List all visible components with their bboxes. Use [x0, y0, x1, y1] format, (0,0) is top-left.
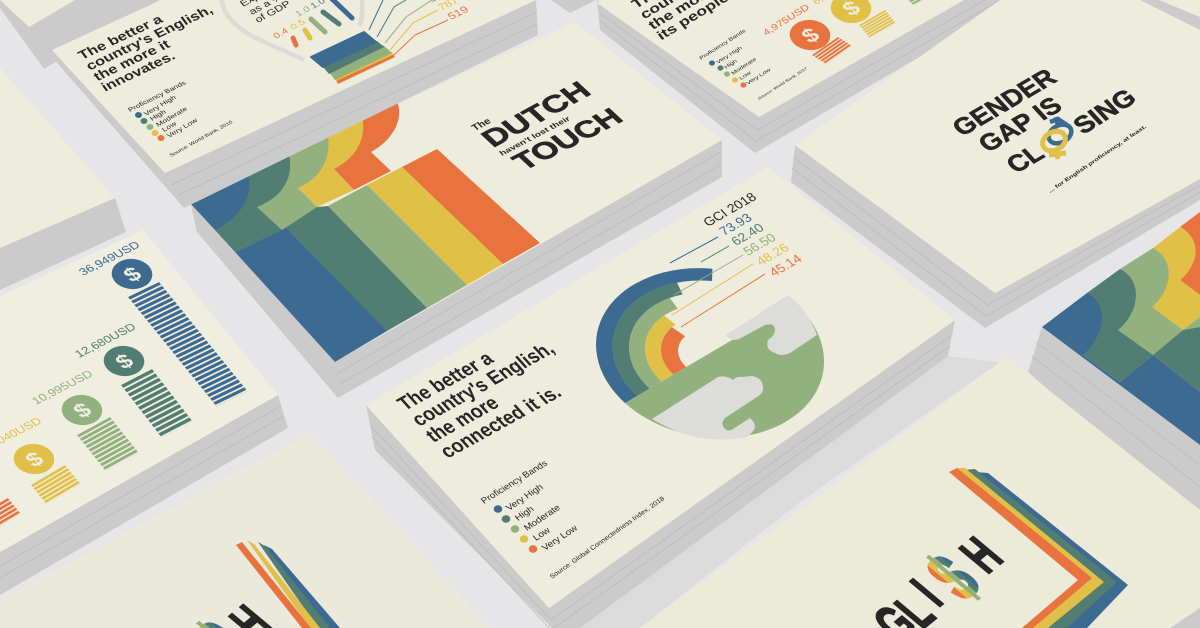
stacked bar: very low — [812, 37, 852, 64]
artwork: rainbow keys — [1042, 212, 1200, 445]
stripes: rainbow corner — [236, 540, 340, 628]
value labels: 73.93 — [716, 211, 755, 238]
card: top-middle stack corner — [551, 0, 596, 13]
source: Source: Global Connectedness Index, 2018 — [549, 496, 666, 580]
value label: 4,975USD — [761, 3, 812, 38]
icon: blue coin: $ — [118, 262, 147, 286]
legend title: Proficiency Bands — [699, 29, 747, 61]
corner stack — [1170, 608, 1200, 628]
stripe: orange — [402, 149, 540, 264]
icon: green coin: $ — [68, 398, 97, 422]
stacked bar: low — [31, 465, 81, 504]
heading: innovates. — [99, 49, 178, 95]
band: orange — [334, 92, 399, 190]
title letters: H — [947, 527, 1015, 583]
title: The — [470, 116, 494, 133]
stripe: yellow — [367, 167, 503, 285]
ring: high — [572, 278, 737, 396]
card: bottom-left ENGLISH — [0, 433, 490, 628]
bulb base — [311, 32, 395, 84]
title — [947, 64, 1142, 178]
card: The Dutch haven't lost their touch — [190, 22, 722, 398]
legend swatches and labels: Very High — [716, 46, 743, 65]
small bars — [293, 0, 352, 45]
ring: low — [618, 315, 708, 382]
title letters: I — [898, 569, 954, 616]
value labels — [700, 190, 805, 279]
ring: very low — [641, 326, 706, 374]
ring: very high — [549, 250, 768, 403]
shadow below GCI card — [553, 356, 1000, 628]
icon: yellow coin: $ — [20, 447, 49, 471]
stacked bar: moderate — [77, 417, 139, 471]
stripe: blue — [235, 228, 387, 362]
title: GENDER — [947, 64, 1063, 141]
legend swatches and labels — [709, 46, 773, 88]
stacked bar: low — [859, 10, 896, 38]
bar values: 1.0 — [293, 5, 313, 19]
landmass: lower cloud — [652, 376, 763, 440]
rings — [549, 250, 768, 403]
card: top-right stack corner — [1140, 0, 1200, 30]
legend swatches and labels: Moderate — [522, 503, 562, 532]
legend swatches and labels: High — [513, 504, 536, 522]
legend swatches and labels: Very Low — [165, 116, 200, 139]
legend swatches and labels: Very Low — [540, 523, 579, 552]
heading: The better a — [393, 348, 498, 415]
legend swatches and labels: Moderate — [154, 105, 189, 128]
title: CL — [1001, 140, 1050, 178]
band: green — [257, 128, 329, 230]
title: GAP IS — [973, 92, 1068, 157]
patent values: 519 — [446, 5, 471, 22]
subtitle: ... for English proficiency, at least. — [1047, 124, 1148, 194]
stripe: green — [328, 185, 467, 308]
chart: blue coin stack — [76, 238, 247, 406]
card: gender gap is closing — [791, 0, 1200, 328]
value labels: GCI 2018 — [700, 190, 759, 229]
leader lines — [369, 0, 448, 55]
chart: green coin stack — [29, 367, 139, 471]
icon: blue coin — [104, 253, 160, 295]
chevron rainbow — [949, 468, 1128, 628]
title letters — [178, 595, 285, 628]
title letters — [860, 527, 1015, 628]
card: blank left card — [0, 68, 126, 290]
stacked bar: very high — [128, 282, 247, 406]
source: Source: World Bank, 2017 — [757, 66, 809, 101]
title: SING — [1067, 83, 1142, 139]
value label: 36,949USD — [76, 238, 143, 278]
value labels: 62.40 — [728, 221, 767, 248]
value labels: 48.26 — [753, 241, 792, 268]
card: top-left blank corner — [0, 0, 160, 69]
card: right rainbow — [1028, 212, 1200, 522]
legend swatches and labels: High — [148, 108, 168, 122]
landmass: upper cloud — [726, 295, 817, 355]
heading: The better a — [76, 12, 167, 63]
chart: green coin stack — [897, 0, 949, 5]
heading: the more it — [91, 38, 173, 84]
chart: teal coin stack — [72, 320, 193, 438]
legend swatches and labels: High — [724, 59, 739, 70]
chart: light bulb — [221, 0, 471, 84]
legend swatches and labels: Low — [739, 70, 753, 81]
title: haven't lost their — [497, 114, 572, 157]
title letters: $ — [908, 540, 997, 614]
heading: the more — [421, 392, 504, 447]
legend swatches and labels — [135, 93, 200, 141]
legend title: Proficiency Bands — [479, 458, 550, 505]
card: bottom-right ENGLISH — [640, 357, 1200, 628]
bulb outline — [221, 0, 362, 60]
title: DUTCH — [475, 77, 597, 152]
chart: orange coin stack — [0, 498, 21, 528]
card: income heading (top middle) — [597, 0, 1017, 153]
artwork: rainbow keys — [190, 92, 540, 362]
legend swatches and labels: Low — [531, 525, 552, 542]
card: innovation bulb — [52, 0, 538, 208]
value label: 12,680USD — [72, 320, 139, 360]
heading: country's English, — [83, 3, 216, 74]
bar values: 0.5 — [288, 18, 308, 32]
legend swatches and labels: Moderate — [731, 57, 758, 76]
chart: yellow coin stack — [0, 415, 81, 504]
legend swatches and labels: Very High — [504, 482, 545, 512]
icon: orange coin: $ — [796, 23, 825, 47]
band: yellow — [298, 110, 363, 207]
chart: yellow coin stack — [811, 0, 896, 38]
leader lines — [670, 237, 765, 327]
title — [470, 77, 630, 175]
legend swatches and labels: Very Low — [746, 67, 773, 86]
card: income by proficiency (left) — [0, 230, 288, 595]
icon: gender symbols — [1039, 117, 1075, 159]
band: teal — [215, 150, 290, 252]
stripe: teal — [282, 206, 427, 331]
chart: connectedness globe — [549, 190, 871, 472]
patent values — [426, 0, 471, 22]
bar values: 0.4 — [271, 26, 291, 41]
bar values — [271, 0, 328, 41]
value labels: 45.14 — [766, 252, 805, 279]
icon: teal coin: $ — [110, 349, 139, 373]
ring: moderate — [596, 297, 723, 388]
chart: orange coin stack — [761, 3, 852, 64]
source: Source: World Bank, 2016 — [169, 120, 234, 158]
card: GCI connected — [366, 167, 955, 628]
globe lower half — [625, 303, 871, 472]
heading: country's English, — [407, 338, 559, 431]
value labels: 56.50 — [740, 231, 779, 258]
stacked bar: high — [121, 369, 193, 438]
legend: Proficiency Bands — [127, 80, 188, 113]
legend swatches and labels: Very High — [142, 93, 178, 117]
band: blue — [190, 175, 250, 230]
heading: connected it is. — [436, 381, 566, 463]
title: TOUCH — [506, 104, 630, 175]
legend swatches and labels: Low — [160, 119, 179, 133]
value label: 10,995USD — [29, 367, 96, 407]
legend swatches and labels — [494, 482, 579, 553]
